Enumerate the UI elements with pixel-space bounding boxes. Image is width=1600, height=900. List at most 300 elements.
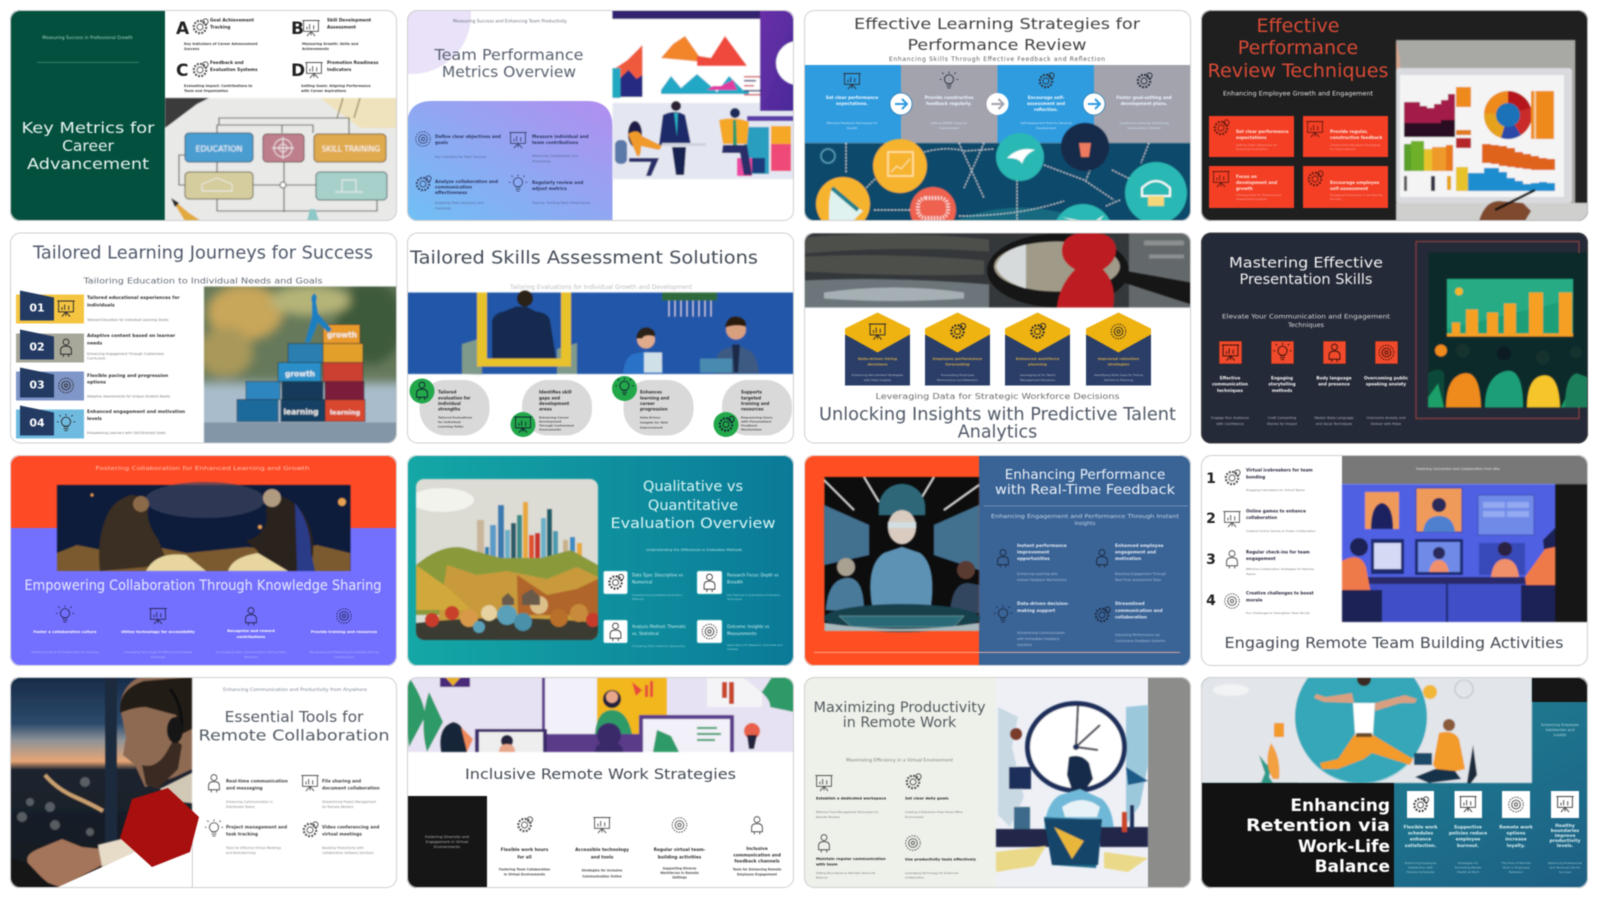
retention columns: Strategies for bbox=[1458, 861, 1478, 865]
numbered list: options bbox=[87, 380, 106, 386]
skill pills: Mechanisms bbox=[741, 428, 762, 432]
retention columns: Healthy bbox=[1555, 824, 1575, 829]
panel: analytics cards: planning bbox=[1028, 362, 1047, 366]
image: connected learning network bbox=[804, 122, 1192, 222]
skills row: techniques bbox=[1217, 388, 1244, 393]
tips list: with team bbox=[816, 862, 838, 866]
process band: assessment and bbox=[1027, 101, 1065, 106]
title: Tailored Learning Journeys for Success bbox=[32, 244, 373, 264]
activity list: 3 bbox=[1206, 552, 1216, 568]
title: Performance Review bbox=[908, 36, 1087, 54]
activity list: 1 bbox=[1206, 471, 1216, 487]
retention columns: Remote work bbox=[1499, 826, 1533, 830]
tools list: task tracking bbox=[226, 832, 258, 838]
skill pills: Through Customized bbox=[539, 424, 574, 428]
metrics list: Evaluation Systems bbox=[210, 67, 258, 73]
slide card: Team Performance Metrics Overview bbox=[406, 10, 794, 222]
slide card: Essential Tools for Remote Collaboration bbox=[10, 677, 397, 888]
metrics list: Key Indicators of Career Advancement bbox=[184, 42, 258, 46]
skill pills: evaluation for bbox=[438, 396, 470, 400]
numbered list: 01 bbox=[29, 302, 45, 314]
numbered list: Tailored educational experiences for bbox=[87, 296, 180, 301]
process band: Provide constructive bbox=[925, 95, 973, 100]
skill pills: for Individual bbox=[438, 420, 461, 424]
strategies row: Workforces in Remote bbox=[660, 871, 699, 875]
collaboration tips bbox=[31, 605, 379, 659]
panel: title block: Retention via bbox=[1246, 816, 1390, 836]
panel: title block: Balance bbox=[1315, 857, 1390, 877]
tips list: Leveraging Technology for Enhanced bbox=[905, 871, 958, 875]
comparison items: Data Type: Descriptive vs bbox=[632, 572, 683, 578]
slide card: Engaging Remote Team Building Activities bbox=[1201, 455, 1588, 666]
panel: technique cards: self-assessment bbox=[1330, 186, 1368, 191]
skill pills: career bbox=[640, 401, 655, 406]
retention columns: Promoting Mental bbox=[1455, 866, 1481, 870]
feedback items: Instant Feedback Mechanisms bbox=[1017, 578, 1067, 582]
panel: title block: Enhancing bbox=[1290, 796, 1390, 816]
numbered list: Adaptive Assessments for Unique Student Needs bbox=[87, 394, 170, 398]
skill pills: Development bbox=[539, 420, 562, 424]
image: presentation audience bbox=[1416, 242, 1588, 418]
title: Performance bbox=[1238, 37, 1358, 59]
retention columns: schedules bbox=[1408, 830, 1433, 836]
comparison items: Measurements bbox=[727, 631, 757, 636]
panel: gradient metrics panel: Outcomes bbox=[435, 206, 452, 210]
retention columns: policies reduce bbox=[1449, 830, 1487, 836]
skills row: speaking anxiety bbox=[1366, 382, 1406, 386]
metrics list: Evaluating Impact: Contributions to bbox=[184, 84, 252, 88]
skills row: Master Body Language bbox=[1314, 416, 1354, 420]
panel: gradient metrics panel: team contributions bbox=[532, 140, 579, 146]
strategies row: feedback channels bbox=[734, 858, 780, 864]
title bbox=[819, 405, 1176, 442]
title bbox=[434, 48, 584, 78]
skills row: Craft Compelling bbox=[1268, 416, 1296, 420]
panel: analytics cards: Data-driven hiring bbox=[858, 356, 897, 361]
title: Essential Tools for bbox=[225, 708, 364, 726]
metrics list: Tracking bbox=[210, 24, 230, 30]
slide card: Effective Learning Strategies for Performance Review bbox=[804, 10, 1192, 222]
comparison items: Analysis bbox=[727, 647, 739, 651]
numbered list: 04 bbox=[29, 416, 45, 430]
feedback items: Continuous Feedback Systems bbox=[1115, 639, 1166, 643]
activity list: bonding bbox=[1246, 474, 1265, 480]
tips list: Use productivity tools effectively bbox=[905, 856, 976, 862]
title bbox=[1229, 256, 1383, 288]
strategies row: Employee Engagement bbox=[737, 872, 777, 876]
title: Maximizing Productivity bbox=[814, 700, 986, 716]
feedback items: collaboration bbox=[1115, 614, 1147, 620]
title: in Remote Work bbox=[843, 715, 957, 731]
retention columns: Enhancing Employee bbox=[1405, 861, 1436, 865]
collaboration tips: Contributions bbox=[334, 655, 354, 659]
metrics list: C bbox=[176, 61, 188, 81]
comparison items: Understanding Qualitative Evaluation bbox=[632, 593, 682, 597]
skills row: methods bbox=[1272, 388, 1293, 393]
process band: Grade-active Criticism bbox=[1127, 126, 1161, 130]
tools list: Boosting Productivity with bbox=[322, 846, 364, 850]
numbered list: 03 bbox=[29, 378, 45, 392]
slide card: Tailored Skills Assessment Solutions bbox=[407, 232, 794, 444]
skills row: and presence bbox=[1318, 382, 1350, 386]
panel: technique cards bbox=[1209, 116, 1388, 208]
process band: Growth bbox=[847, 126, 858, 130]
feedback items: Solutions bbox=[1017, 643, 1032, 647]
numbered list: Enhanced engagement and motivation bbox=[87, 410, 185, 415]
panel: title block bbox=[1201, 783, 1394, 888]
strategies row: Inclusive bbox=[746, 847, 768, 852]
skills row: Stories for Impact bbox=[1267, 422, 1298, 426]
tools list: Tools for Effective Virtual Meetings bbox=[226, 846, 281, 850]
strategies row: Communication Online bbox=[582, 874, 622, 878]
panel: technique cards: Assessment Insights bbox=[1236, 197, 1267, 201]
title: Effective bbox=[1257, 15, 1339, 37]
strategies row: in Virtual Environments bbox=[504, 872, 545, 876]
strategies row: Flexible work hours bbox=[501, 848, 548, 853]
process band: reflection. bbox=[1034, 107, 1059, 112]
feedback items: making support bbox=[1017, 608, 1055, 614]
tips list: Set clear daily goals bbox=[905, 796, 949, 800]
collaboration tips: Fostering Culture of Collaboration for Learning bbox=[31, 650, 99, 654]
panel: technique cards: Encourage employee bbox=[1330, 180, 1379, 185]
panel: gradient metrics panel: Measure individual and bbox=[532, 135, 589, 140]
panel: analytics cards: Enhanced workforce bbox=[1016, 356, 1059, 361]
panel: title block: Work-Life bbox=[1298, 837, 1390, 857]
panel: dark top-right block bbox=[1532, 677, 1588, 702]
skill pills: Supports bbox=[741, 390, 762, 394]
activity list: Engaging Icebreakers for Virtual Teams bbox=[1246, 488, 1305, 492]
skill pills: progression bbox=[640, 406, 668, 412]
skills row: Engage Your Audience bbox=[1211, 416, 1249, 420]
skills row: Deliver with Poise bbox=[1371, 422, 1401, 426]
slide card: Key Metrics for Career Advancement bbox=[10, 10, 400, 221]
panel: analytics cards: Leveraging AI for Talent bbox=[1020, 373, 1055, 377]
title: Advancement bbox=[27, 155, 149, 173]
skill pills: Data-Driven bbox=[640, 416, 660, 420]
panel: technique cards: for Improvement bbox=[1330, 147, 1356, 151]
skill pills: areas bbox=[539, 406, 552, 412]
strategies row: Settings bbox=[672, 876, 687, 880]
title: Team Performance bbox=[433, 46, 584, 64]
panel: gradient metrics panel: adjust metrics bbox=[532, 186, 567, 192]
retention columns: loyalty. bbox=[1507, 843, 1526, 849]
skill pills: Improvement bbox=[640, 426, 663, 430]
strategies row: Fostering Team Collaboration bbox=[499, 868, 550, 872]
retention columns: increase bbox=[1505, 836, 1527, 842]
process band: expectations. bbox=[836, 101, 868, 106]
panel: black subtitle panel: Engagement in Virtual bbox=[426, 839, 468, 844]
title: Qualitative vs bbox=[643, 479, 743, 495]
panel: technique cards: constructive feedback bbox=[1330, 135, 1383, 140]
collaboration tips: Foster a collaborative culture bbox=[33, 629, 97, 634]
skill pills: targeted bbox=[741, 396, 761, 400]
title: Presentation Skills bbox=[1240, 272, 1372, 288]
feedback items: Enhanced employee bbox=[1115, 544, 1164, 549]
collaboration tips: contributions bbox=[237, 634, 266, 639]
title bbox=[1208, 15, 1388, 82]
retention columns: Flexible work bbox=[1404, 826, 1437, 830]
title: Effective Learning Strategies for bbox=[854, 15, 1141, 33]
panel: technique cards: expectations bbox=[1236, 135, 1267, 140]
panel: analytics cards: Workforce Planning bbox=[1104, 378, 1133, 382]
image: jumping figure and laptop user bbox=[1201, 651, 1532, 784]
panel: black subtitle panel: Fostering Diversity and bbox=[425, 834, 469, 839]
title: with Real-Time Feedback bbox=[995, 482, 1175, 498]
activity list: Fun Challenges to Strengthen Team Bonds bbox=[1246, 611, 1310, 615]
arrows between steps bbox=[890, 93, 1105, 115]
numbered list: Tailored Education for Individual Learning Styles bbox=[86, 318, 169, 322]
tools list: Distributed Teams bbox=[226, 805, 255, 809]
panel: gradient metrics panel: goals bbox=[435, 140, 448, 146]
skills row: Body language bbox=[1316, 376, 1352, 380]
slide card: Mastering Effective Presentation Skills bbox=[1201, 232, 1588, 444]
retention columns: Work in Employee bbox=[1502, 866, 1530, 870]
panel: technique cards: Provide regular, bbox=[1330, 129, 1368, 134]
slide card: Enhancing Performance with Real-Time Feedback bbox=[804, 455, 1191, 666]
feedback items: motivation bbox=[1115, 556, 1141, 562]
tools list: for Remote Workers bbox=[322, 805, 354, 809]
comparison items: vs. Statistical bbox=[632, 631, 659, 636]
image: education flowchart: EDUCATION bbox=[195, 144, 243, 154]
comparison items: Numerical bbox=[632, 580, 652, 584]
title bbox=[814, 700, 986, 731]
collaboration tips: Recognize and reward bbox=[227, 628, 275, 633]
feedback items: improvement bbox=[1017, 550, 1049, 556]
strategies row: Supporting Diverse bbox=[663, 866, 696, 870]
panel: gradient metrics panel: Key Indicators for Team Success bbox=[435, 155, 487, 159]
panel: gradient metrics panel: Productivity bbox=[532, 160, 551, 164]
skill pills: Assessments bbox=[539, 428, 561, 432]
skills row: and Vocal Techniques bbox=[1316, 422, 1352, 426]
retention columns: Health at Work bbox=[1457, 870, 1479, 874]
subtitle: Measuring Success in Professional Growth bbox=[42, 35, 133, 41]
subtitle bbox=[991, 514, 1179, 527]
subtitle: Maximizing Efficiency in a Virtual Environment bbox=[846, 758, 953, 764]
title: Empowering Collaboration Through Knowledge Sharing bbox=[24, 578, 382, 594]
image: professionals in blue room bbox=[407, 290, 794, 374]
retention columns: Success bbox=[1559, 870, 1571, 874]
activity list: Creative challenges to boost bbox=[1246, 590, 1314, 596]
slide card: Unlocking Insights with Predictive Talent Analytics bbox=[804, 232, 1191, 444]
feedback items bbox=[994, 543, 1166, 647]
slide card: Empowering Collaboration Through Knowledge Sharing bbox=[10, 455, 397, 666]
numbered list: individuals bbox=[87, 302, 115, 308]
subtitle: Enhancing Employee bbox=[1541, 723, 1579, 727]
title: Unlocking Insights with Predictive Talent bbox=[819, 405, 1176, 425]
retention columns: The Role of Remote bbox=[1501, 861, 1531, 865]
tools list: Project management and bbox=[226, 826, 287, 830]
collaboration tips: Members bbox=[244, 655, 258, 659]
tools list: Streamlining Project Management bbox=[322, 800, 376, 804]
metrics list: Achievements bbox=[302, 47, 329, 51]
process band: development plans. bbox=[1121, 101, 1168, 106]
strategies row: for all bbox=[517, 854, 532, 860]
skill pills bbox=[410, 376, 792, 437]
numbered list: needs bbox=[87, 340, 103, 346]
tools list: Enhancing Communication in bbox=[226, 800, 273, 804]
tools list bbox=[205, 775, 380, 855]
process band: Self-Assessment Tools for Personal bbox=[1020, 121, 1072, 125]
skill pills: with Personalized bbox=[741, 420, 771, 424]
subtitle: Elevate Your Communication and Engagement bbox=[1222, 312, 1390, 320]
process band: Set clear performance bbox=[826, 95, 878, 100]
activity list: Creative Online Games to Foster Collaboration bbox=[1246, 529, 1316, 533]
comparison items: Analysis Method: Thematic bbox=[632, 624, 686, 629]
tools list: Collaborative Software Solutions bbox=[322, 851, 374, 855]
collaboration tips: Provide training and resources bbox=[311, 629, 378, 634]
tools list: and messaging bbox=[226, 786, 263, 792]
image: growth learning blocks: learning bbox=[283, 408, 319, 416]
feedback items: Streamlined bbox=[1115, 602, 1145, 607]
skill pills: gaps and bbox=[539, 396, 560, 400]
retention columns: productivity bbox=[1550, 838, 1580, 844]
comparison items: Methods bbox=[632, 597, 644, 601]
metrics list: Measuring Growth: Skills and bbox=[302, 42, 358, 46]
image: growth learning blocks: growth bbox=[285, 370, 315, 378]
panel: analytics cards bbox=[845, 312, 1151, 386]
strategies row: Accessible technology bbox=[575, 848, 629, 853]
metrics list: Feedback and bbox=[210, 61, 244, 66]
metrics list: A bbox=[176, 19, 190, 39]
tips list: Remote Workers bbox=[816, 815, 840, 819]
numbered list: Curriculum bbox=[87, 356, 106, 360]
feedback items: engagement and bbox=[1115, 550, 1156, 556]
panel: technique cards: Engaging Employees in the Review bbox=[1330, 193, 1383, 197]
tools list: virtual meetings bbox=[322, 832, 362, 838]
numbered list bbox=[16, 290, 185, 438]
retention columns: improve bbox=[1555, 833, 1575, 839]
panel: analytics cards: Improved retention bbox=[1098, 356, 1139, 361]
title bbox=[198, 708, 390, 744]
retention columns: levels. bbox=[1557, 843, 1574, 849]
subtitle bbox=[1222, 312, 1390, 329]
panel: gradient metrics panel: Measuring Collaboration and bbox=[532, 154, 578, 158]
title: Review Techniques bbox=[1208, 60, 1388, 82]
panel: gradient metrics panel: Analyzing Team Dynamics and bbox=[435, 201, 484, 205]
tips list: Setting Boundaries to Maintain Work-Life bbox=[816, 871, 875, 875]
tools list: File sharing and bbox=[322, 780, 361, 784]
retention columns: boundaries bbox=[1551, 828, 1580, 834]
collaboration tips: Recognizing and Rewarding Knowledge Sharing bbox=[310, 650, 378, 654]
subtitle: Understanding the Differences in Evaluation Methods bbox=[646, 548, 742, 552]
activity list: Online games to enhance bbox=[1246, 508, 1306, 514]
metrics list: Setting Goals: Aligning Performance bbox=[301, 84, 371, 88]
image: education flowchart bbox=[165, 98, 400, 221]
panel: gradient metrics panel: Define clear objectives and bbox=[435, 135, 501, 140]
retention columns: Balancing Professional bbox=[1548, 861, 1582, 865]
title: Remote Collaboration bbox=[198, 726, 390, 744]
metrics list: D bbox=[291, 61, 305, 81]
feedback items: Improving Performance via bbox=[1115, 633, 1160, 637]
process band: Foster goal-setting and bbox=[1116, 95, 1172, 100]
subtitle: Insights bbox=[1075, 521, 1096, 527]
skills row: storytelling bbox=[1268, 382, 1296, 386]
metrics list: Success bbox=[184, 47, 199, 51]
panel: technique cards: growth bbox=[1236, 186, 1253, 191]
skill pills: Enhances bbox=[640, 390, 662, 394]
process band bbox=[804, 65, 1191, 143]
numbered list: Adaptive content based on learner bbox=[87, 334, 175, 339]
image: futuristic control room bbox=[824, 477, 980, 632]
metrics list: with Career Aspirations bbox=[301, 89, 346, 93]
activity list: engagement bbox=[1246, 556, 1276, 561]
process band: Improvement bbox=[939, 126, 960, 130]
image: man with headset at sunset bbox=[10, 677, 192, 888]
retention columns: Supportive bbox=[1454, 826, 1482, 830]
activity list: Teams bbox=[1245, 572, 1256, 576]
numbered list: Enhancing Engagement Through Customized bbox=[87, 352, 164, 356]
title: Mastering Effective bbox=[1229, 256, 1383, 272]
panel: technique cards: Utilizing Data for Performance bbox=[1236, 193, 1281, 197]
slide card: Effective Performance Review Techniques bbox=[1201, 10, 1588, 221]
panel: analytics cards: with Data Insights bbox=[864, 378, 892, 382]
strategies row: and tools bbox=[591, 854, 614, 860]
skills row: Engaging bbox=[1271, 376, 1293, 380]
process band: feedback regularly. bbox=[926, 101, 972, 106]
subtitle: Enhancing Engagement and Performance Through Instant bbox=[991, 514, 1179, 520]
feedback items: Data-driven decision- bbox=[1017, 602, 1069, 607]
activity list: collaboration bbox=[1246, 515, 1277, 520]
skill pills: learning and bbox=[640, 396, 669, 400]
metrics list: Skill Development bbox=[327, 18, 371, 24]
comparison items: Outcome: Insights vs bbox=[727, 624, 769, 629]
skill pills: resources bbox=[741, 406, 764, 412]
panel: analytics cards: strategies bbox=[1108, 362, 1130, 366]
decorative lavender circle bbox=[408, 10, 472, 74]
comparison items: Research Focus: Depth vs bbox=[727, 572, 779, 578]
retention columns: Retention bbox=[1509, 870, 1523, 874]
tips list: Maintain regular communication bbox=[816, 856, 886, 861]
panel: technique cards: Focus on bbox=[1236, 174, 1257, 179]
metrics list bbox=[176, 18, 379, 93]
comparison items: Comparing Data Collection Approaches bbox=[632, 644, 685, 648]
retention columns: Flexible Schedules bbox=[1407, 870, 1435, 874]
feedback items: Boosting Engagement Through bbox=[1115, 572, 1166, 576]
title bbox=[610, 479, 776, 532]
retention columns: burnout. bbox=[1457, 843, 1479, 849]
skill pills: individual bbox=[438, 401, 461, 406]
feedback items: with Immediate Feedback bbox=[1017, 637, 1060, 641]
tips list: Balance bbox=[816, 876, 828, 880]
title bbox=[855, 16, 1141, 51]
skill pills: Learning Paths bbox=[438, 424, 464, 428]
panel: technique cards: development and bbox=[1236, 180, 1277, 185]
subtitle: Tailoring Education to Individual Needs and Goals bbox=[82, 276, 322, 286]
title bbox=[995, 467, 1175, 498]
skill pills: Tailored bbox=[438, 390, 456, 394]
panel: technique cards: Process bbox=[1330, 197, 1342, 201]
panel: gradient metrics panel: communication bbox=[435, 184, 472, 190]
retention columns: and Personal Life for bbox=[1550, 866, 1581, 870]
metrics list: Indicators bbox=[327, 67, 352, 73]
image: data landscape bbox=[410, 479, 600, 640]
title bbox=[22, 119, 155, 173]
title: Key Metrics for bbox=[22, 119, 155, 137]
image: growth learning blocks bbox=[203, 285, 397, 444]
collaboration tips: Exchange bbox=[151, 655, 165, 659]
feedback items: opportunities bbox=[1017, 556, 1050, 562]
panel: analytics cards: Management Decisions bbox=[1020, 378, 1055, 382]
retention columns: satisfaction. bbox=[1405, 843, 1437, 849]
strategies row: building activities bbox=[658, 854, 702, 860]
image: growth learning blocks: growth bbox=[327, 330, 357, 340]
subtitle: Fostering Connection and Collaboration from Afar bbox=[1416, 467, 1501, 471]
title: Metrics Overview bbox=[442, 63, 576, 81]
numbered list: Empowering Learners with Self-Directed Goals bbox=[87, 431, 166, 435]
panel: gradient metrics panel: Regularly review and bbox=[532, 181, 583, 186]
feedback items: Real-Time Assessment Tools bbox=[1115, 578, 1161, 582]
panel: gradient metrics panel bbox=[407, 101, 612, 221]
